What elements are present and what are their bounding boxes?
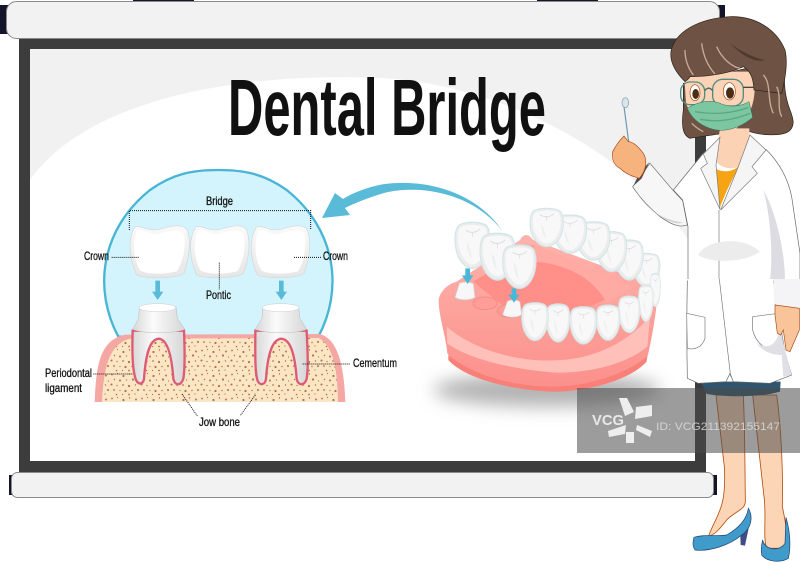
floating bridge — [455, 222, 536, 288]
screen surface — [30, 49, 695, 461]
watermark logo petals — [608, 398, 652, 443]
watermark id: ID: VCG211392155147 — [656, 421, 780, 433]
neck — [715, 128, 750, 168]
legs — [708, 395, 786, 548]
skirt — [701, 382, 781, 396]
right pocket — [753, 313, 785, 352]
screen frame — [19, 38, 706, 472]
left crown — [130, 226, 189, 278]
orange shirt — [715, 166, 739, 207]
label: Bridge: Bridge — [206, 194, 233, 208]
implant sockets — [473, 297, 524, 317]
bottom roller end caps — [9, 475, 717, 495]
title: Dental Bridge — [228, 63, 546, 152]
back hair — [682, 63, 793, 138]
face mask — [687, 101, 753, 130]
face — [684, 72, 755, 131]
blue arrows on model — [462, 268, 520, 303]
raised arm sleeve — [633, 162, 687, 226]
label: Crown left: Crown — [84, 249, 109, 263]
right crown — [251, 226, 310, 278]
lab coat upper — [673, 135, 800, 378]
left shoe — [693, 508, 751, 550]
raised hand — [612, 136, 646, 178]
right sleeve — [773, 279, 800, 309]
label: Jow bone: Jow bone — [199, 415, 240, 429]
dental mirror — [622, 98, 633, 177]
blue down arrows — [152, 281, 287, 300]
blue circle backdrop — [104, 170, 332, 337]
hair fringe — [671, 17, 786, 132]
right shoe — [761, 517, 790, 561]
coat outline — [687, 280, 792, 383]
panel: bridge diagram — [93, 170, 351, 416]
label: Periodontal ligament: Periodontal — [45, 366, 92, 380]
label: Cementum: Cementum — [353, 356, 397, 370]
top roller — [6, 2, 720, 38]
pontic — [191, 226, 249, 278]
character: dentist lower body — [693, 382, 790, 561]
label: Pontic: Pontic — [206, 288, 231, 302]
coat shading — [757, 330, 792, 377]
top roller end caps — [0, 0, 725, 34]
character: dentist upper body — [612, 17, 800, 378]
jaw gum and bone — [95, 334, 345, 402]
left tooth stump — [132, 304, 185, 384]
lower jaw gum — [439, 235, 656, 392]
abutment stumps — [455, 282, 522, 317]
label: Crown right: Crown — [323, 249, 348, 263]
upper row of teeth — [530, 208, 660, 287]
watermark logo text: VCG — [592, 412, 624, 429]
label: Periodontal ligament — [45, 366, 92, 395]
lab coat lower details — [687, 279, 800, 383]
glasses — [681, 79, 754, 106]
bottom roller — [12, 472, 714, 498]
eyes — [690, 83, 735, 101]
leader lines — [93, 211, 351, 416]
soft shadow — [433, 373, 660, 407]
arrow: curved pointer to diagram — [322, 183, 503, 232]
panel: denture model — [433, 208, 661, 407]
lower row of teeth — [522, 273, 661, 344]
watermark — [577, 388, 800, 453]
left pocket — [687, 313, 705, 349]
label: Periodontal ligament: ligament — [45, 381, 83, 395]
right tooth stump — [255, 304, 308, 384]
lower hand — [775, 305, 799, 352]
